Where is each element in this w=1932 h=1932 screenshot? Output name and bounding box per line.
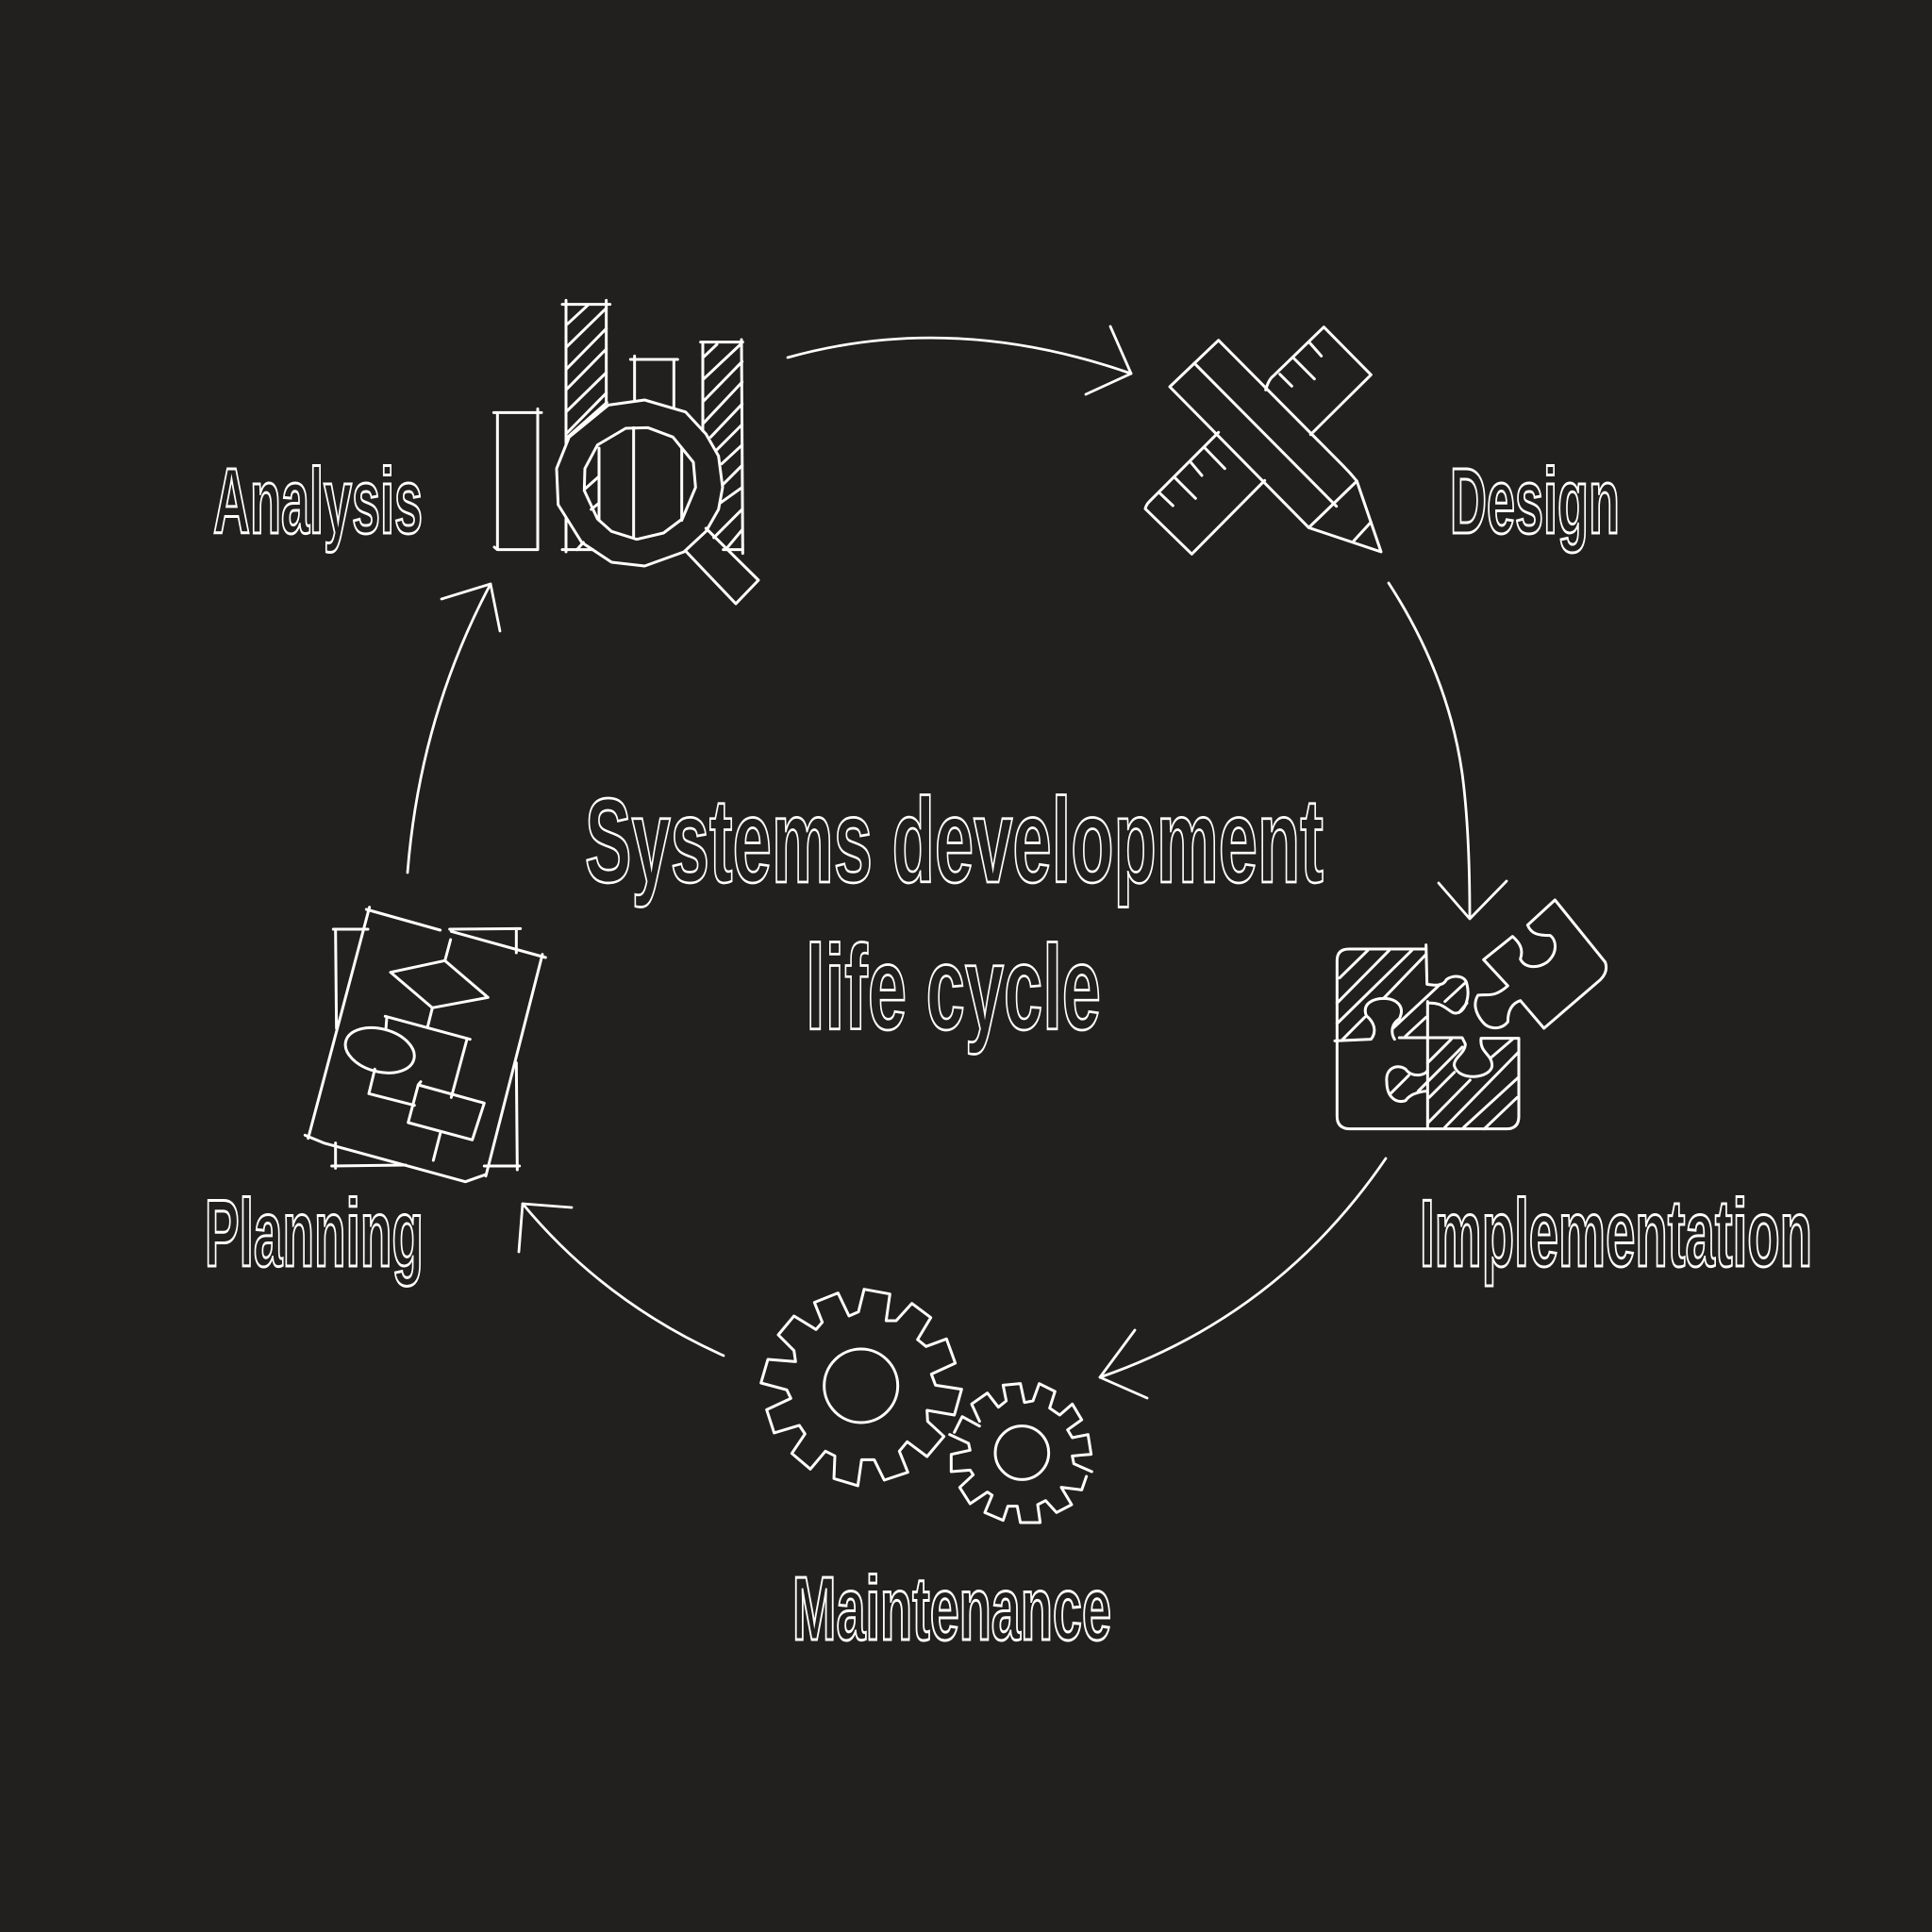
icon: flowchart on paper sheets xyxy=(305,908,545,1182)
icon: pencil and ruler xyxy=(1145,327,1381,554)
title xyxy=(585,774,1324,1055)
icon: gears xyxy=(761,1290,1091,1523)
label: Maintenance: Maintenance xyxy=(792,1558,1111,1659)
arrow: design to implementation xyxy=(1389,583,1507,919)
label: Analysis: Analysis xyxy=(213,449,423,553)
title: life cycle xyxy=(806,921,1101,1055)
title: Systems development xyxy=(585,774,1324,908)
icon: bar chart with magnifying glass xyxy=(493,300,758,604)
arrow: implementation to maintenance xyxy=(1100,1158,1386,1398)
arrow: maintenance to planning xyxy=(519,1204,724,1356)
arrow: analysis to design xyxy=(788,326,1131,394)
arrow: planning to analysis xyxy=(408,584,500,873)
icon: puzzle pieces xyxy=(1335,900,1607,1129)
label: Design: Design xyxy=(1450,449,1620,553)
label: Planning: Planning xyxy=(205,1181,424,1287)
